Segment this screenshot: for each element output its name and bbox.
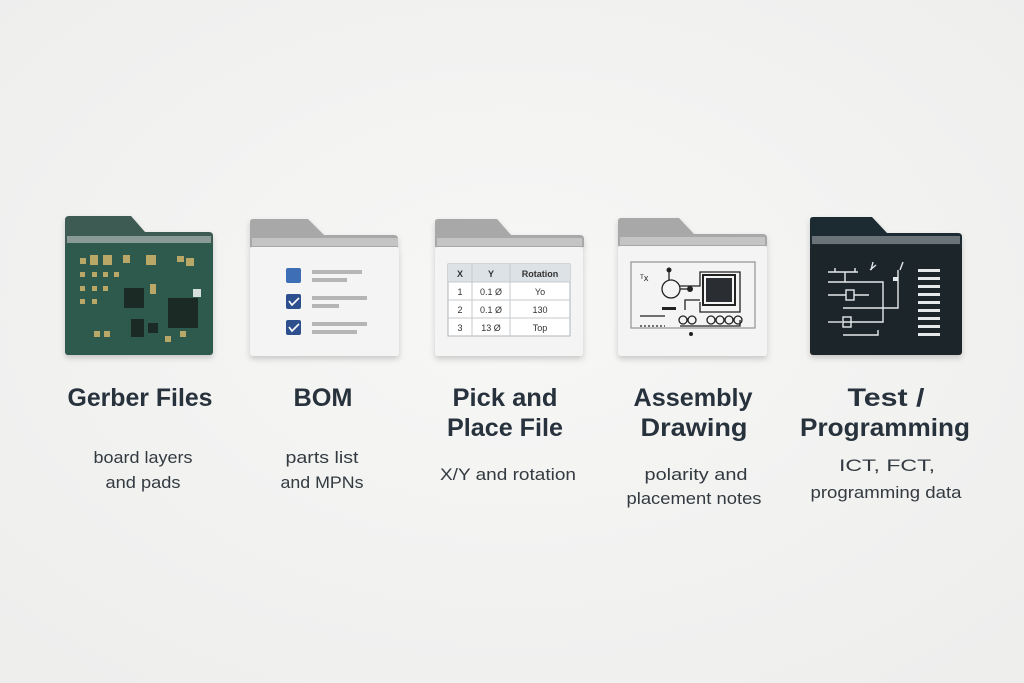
table: Y: [488, 269, 494, 279]
desc: pick and place: X/Y and rotation: [440, 465, 576, 484]
pcb details: [80, 255, 194, 342]
title: gerber files: Gerber Files: [68, 384, 212, 412]
table: 130: [532, 305, 548, 315]
desc: bom: and MPNs: [280, 473, 364, 492]
circuit: [828, 262, 903, 335]
schematic: [631, 262, 755, 328]
title: test programming: Programming: [800, 414, 970, 442]
table: 13 Ø: [481, 323, 501, 333]
title: pick and place file: [447, 384, 563, 442]
table: 3: [457, 323, 463, 333]
title: pick and place file: Pick and: [452, 384, 558, 412]
desc: assembly: [626, 465, 762, 508]
folder: bom: [250, 219, 399, 356]
table: 0.1 Ø: [480, 305, 502, 315]
desc: bom: [280, 448, 364, 492]
table: X: [457, 269, 463, 279]
title: assembly drawing: Drawing: [640, 414, 748, 442]
table: Yo: [535, 287, 545, 297]
desc: bom: parts list: [286, 448, 359, 467]
folder: gerber files: [65, 216, 213, 355]
checklist: [286, 268, 367, 335]
desc: assembly: placement notes: [626, 489, 762, 508]
folder: pick and place: [435, 219, 584, 356]
table: 0.1 Ø: [480, 287, 502, 297]
table: 1: [457, 287, 463, 297]
title: test programming: Test /: [848, 384, 925, 412]
desc: gerber: and pads: [106, 473, 180, 492]
table: [448, 264, 570, 336]
folder: assembly drawing: [618, 218, 767, 356]
folder: test programming: [810, 217, 962, 355]
title: assembly drawing: Assembly: [634, 384, 753, 412]
table: 2: [457, 305, 463, 315]
title: assembly drawing: [634, 384, 753, 442]
title: pick and place file: Place File: [447, 414, 563, 442]
table: Rotation: [522, 269, 558, 279]
desc: test: programming data: [810, 483, 962, 502]
desc: test: ICT, FCT,: [839, 456, 935, 475]
table: Top: [533, 323, 547, 333]
title: test programming: [800, 384, 970, 442]
desc: gerber: [94, 448, 192, 492]
folder: assembly drawing: ᵀx: [640, 273, 649, 283]
desc: gerber: board layers: [94, 448, 192, 467]
desc: assembly: polarity and: [644, 465, 748, 484]
title: bom: BOM: [294, 384, 352, 412]
desc: test: [810, 456, 962, 502]
